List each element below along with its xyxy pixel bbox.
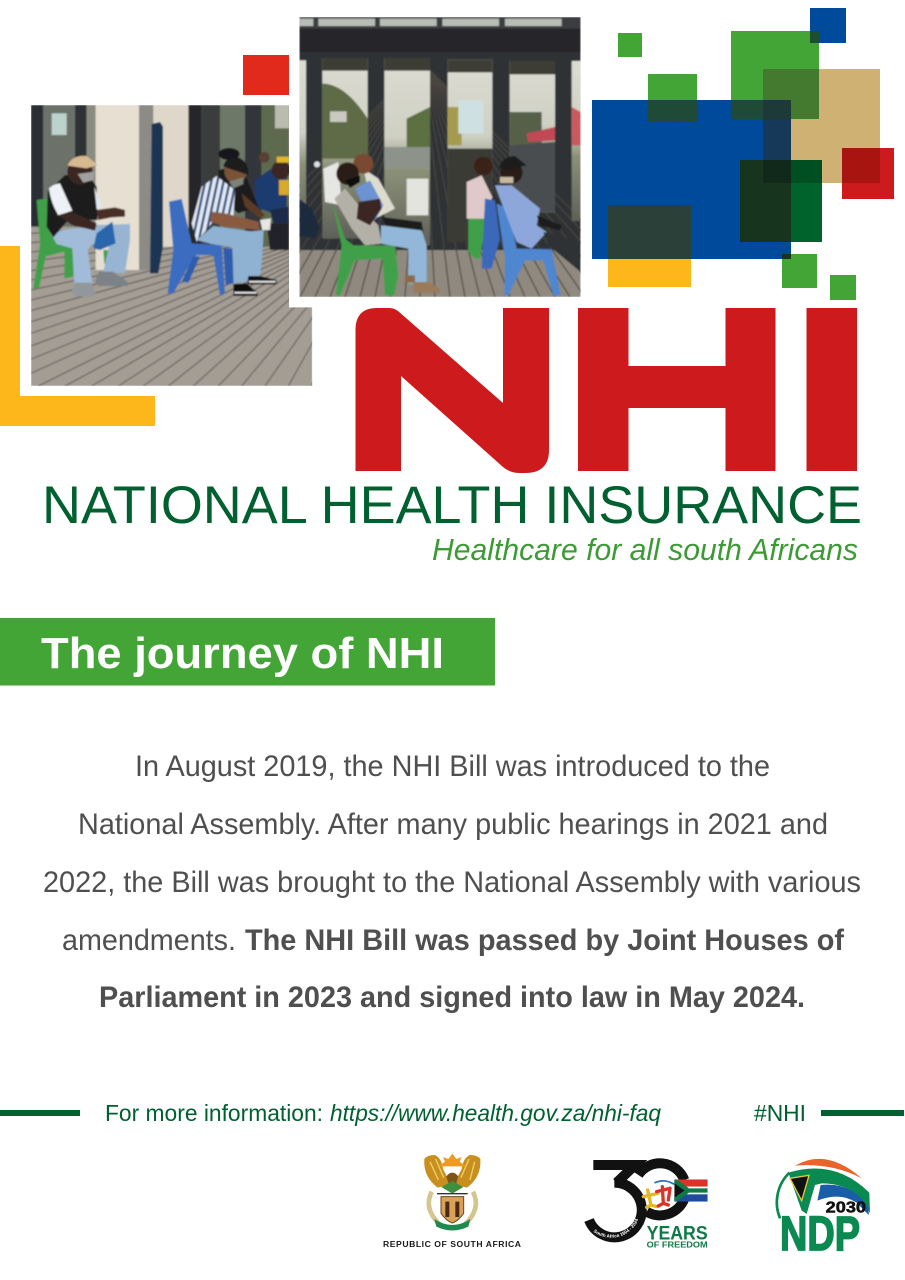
footer information line: #NHI — [754, 1100, 806, 1126]
tagline: Healthcare for all south Africans — [432, 532, 858, 567]
body paragraph: Parliament in 2023 and signed into law in May 2024. — [99, 981, 805, 1014]
logo: 30 Years of Freedom — [584, 1158, 708, 1249]
man in striped shirt — [168, 199, 225, 295]
footer information line: For more information: — [105, 1100, 323, 1126]
logo: NDP 2030 — [777, 1159, 870, 1261]
footer information line: https://www.health.gov.za/nhi-faq — [330, 1100, 661, 1126]
logo: South African coat of arms — [383, 1154, 521, 1249]
decorative yellow corner bracket — [0, 246, 155, 426]
body paragraph: In August 2019, the NHI Bill was introduced to the — [135, 750, 770, 783]
man in cap — [33, 198, 73, 288]
group on the right with blue chairs — [467, 218, 485, 260]
footer information line — [0, 1100, 904, 1126]
NHI logotype — [356, 308, 857, 473]
man in grey shirt on green chair — [333, 203, 398, 295]
logo: NDP 2030: NDP — [780, 1207, 860, 1261]
section heading banner: The journey of NHI — [41, 629, 444, 678]
body paragraph: National Assembly. After many public hearings in 2021 and — [78, 808, 828, 841]
logo: NDP 2030: 2030 — [826, 1199, 866, 1216]
title: National Health Insurance: NATIONAL HEALTH INSURANCE — [42, 476, 862, 535]
logo: South African coat of arms: REPUBLIC OF SOUTH AFRICA — [383, 1239, 521, 1249]
body paragraph: The NHI Bill was passed by Joint Houses of — [245, 924, 844, 957]
section heading banner — [0, 618, 495, 686]
body paragraph: amendments. — [62, 924, 236, 957]
background seated people on right of the left photo — [255, 168, 287, 215]
photo: people waiting on chairs outside a clinic, left — [31, 105, 312, 386]
white frame behind right photo — [289, 8, 590, 307]
background person left of the door — [299, 199, 320, 239]
red accent square — [243, 55, 289, 95]
body paragraph — [43, 750, 861, 1014]
logo: 30 Years of Freedom: YEARS — [647, 1223, 708, 1244]
logo: 30 Years of Freedom: OF FREEDOM — [647, 1240, 708, 1249]
photo: people waiting in front of glass doors, right — [299, 17, 581, 297]
body paragraph: 2022, the Bill was brought to the National Assembly with various — [43, 866, 861, 899]
logo: 30 Years of Freedom: South Africa 1994 - 2024 — [594, 1218, 638, 1238]
decorative overlapping colour squares — [592, 8, 894, 300]
